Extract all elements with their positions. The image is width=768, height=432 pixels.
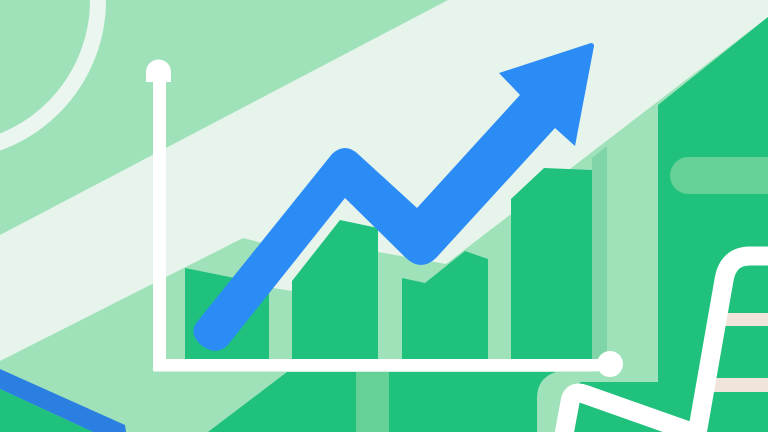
- y axis: [146, 59, 171, 371]
- lower vertical stripe: [356, 372, 389, 432]
- white ladder line: [563, 256, 768, 432]
- lower rung: [712, 378, 768, 392]
- chart axes: [146, 59, 623, 377]
- blue corner bar: [0, 369, 126, 432]
- green background block: [208, 17, 768, 432]
- green corner triangle: [0, 389, 93, 432]
- decorative ring: [0, 0, 98, 152]
- bar 1: [185, 268, 269, 360]
- mid-green column: [592, 146, 607, 372]
- x axis end dot: [597, 351, 623, 377]
- bar 3: [402, 251, 488, 360]
- blue trend arrow: [193, 43, 594, 351]
- light curved band: [537, 372, 658, 432]
- bar 2: [292, 220, 378, 360]
- upper rung: [724, 313, 768, 326]
- bar chart: [185, 168, 592, 360]
- x axis: [153, 359, 603, 372]
- pill shape: [670, 157, 768, 194]
- bar 4: [511, 168, 592, 360]
- ladder rungs: [712, 313, 768, 392]
